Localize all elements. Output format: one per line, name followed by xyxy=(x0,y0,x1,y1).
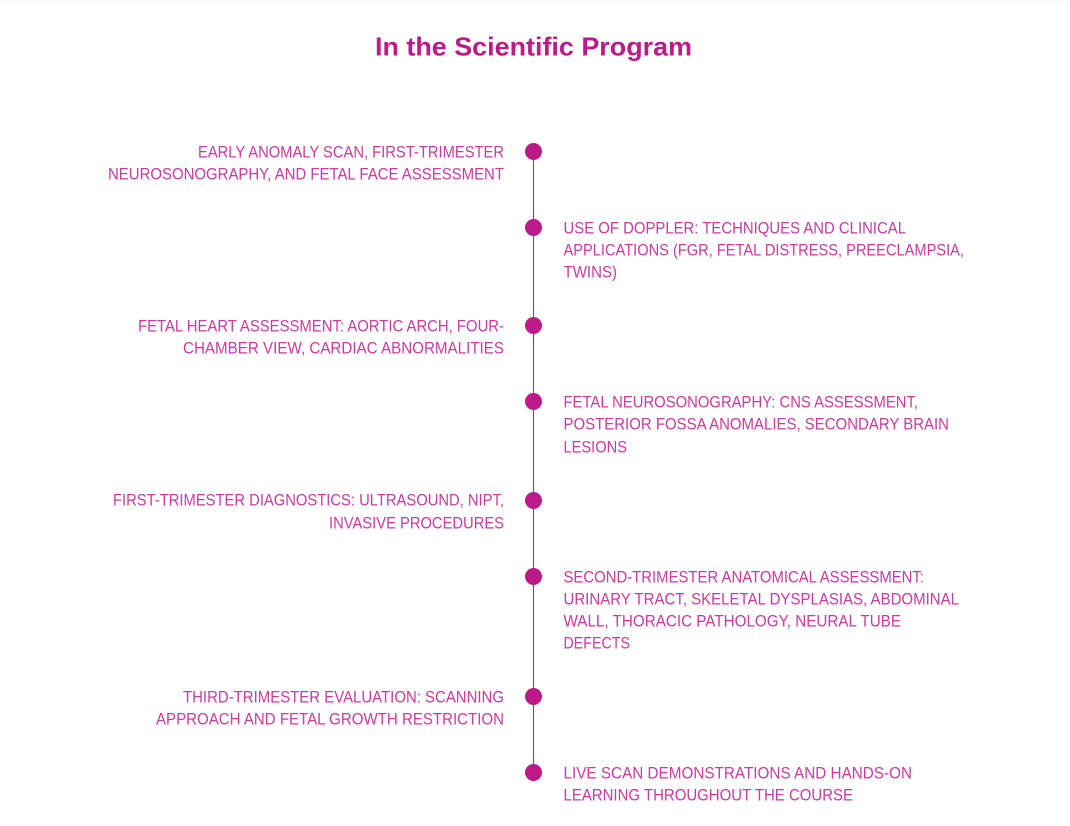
item 3: fetal heart assessment: FETAL HEART ASSESSMENT: AORTIC ARCH, FOUR- xyxy=(138,318,504,336)
timeline dot 4 xyxy=(525,393,542,410)
timeline dot 5 xyxy=(525,492,542,509)
item 8: live scan demonstrations: LEARNING THROUGHOUT THE COURSE xyxy=(564,786,853,804)
item 4: fetal neurosonography xyxy=(564,394,949,456)
timeline dot 2 xyxy=(525,219,542,236)
item 5: first-trimester diagnostics: INVASIVE PROCEDURES xyxy=(329,514,504,532)
timeline dot 7 xyxy=(525,688,542,705)
timeline dot 1 xyxy=(525,143,542,160)
title: In the Scientific Program xyxy=(375,32,692,62)
item 3: fetal heart assessment: CHAMBER VIEW, CARDIAC ABNORMALITIES xyxy=(183,340,504,358)
item 6: second-trimester anatomical assessment: WALL, THORACIC PATHOLOGY, NEURAL TUBE xyxy=(564,612,901,630)
item 8: live scan demonstrations: LIVE SCAN DEMONSTRATIONS AND HANDS-ON xyxy=(564,764,912,782)
item 7: third-trimester evaluation: APPROACH AND FETAL GROWTH RESTRICTION xyxy=(156,710,504,728)
item 7: third-trimester evaluation xyxy=(156,688,504,728)
item 5: first-trimester diagnostics xyxy=(113,492,504,532)
item 5: first-trimester diagnostics: FIRST-TRIMESTER DIAGNOSTICS: ULTRASOUND, NIPT, xyxy=(113,492,504,510)
item 1: early anomaly scan xyxy=(108,144,504,184)
item 6: second-trimester anatomical assessment xyxy=(564,568,959,652)
item 2: use of doppler xyxy=(564,220,964,282)
item 2: use of doppler: USE OF DOPPLER: TECHNIQUES AND CLINICAL xyxy=(564,220,906,238)
item 7: third-trimester evaluation: THIRD-TRIMESTER EVALUATION: SCANNING xyxy=(183,688,504,706)
timeline vertical line xyxy=(533,152,534,773)
timeline dot 8 xyxy=(525,764,542,781)
item 4: fetal neurosonography: LESIONS xyxy=(564,438,627,456)
item 2: use of doppler: APPLICATIONS (FGR, FETAL DISTRESS, PREECLAMPSIA, xyxy=(564,242,964,260)
item 4: fetal neurosonography: POSTERIOR FOSSA ANOMALIES, SECONDARY BRAIN xyxy=(564,416,949,434)
item 1: early anomaly scan: EARLY ANOMALY SCAN, FIRST-TRIMESTER xyxy=(198,144,504,162)
timeline dot 3 xyxy=(525,317,542,334)
item 6: second-trimester anatomical assessment: URINARY TRACT, SKELETAL DYSPLASIAS, ABDOMINAL xyxy=(564,590,959,608)
item 4: fetal neurosonography: FETAL NEUROSONOGRAPHY: CNS ASSESSMENT, xyxy=(564,394,918,412)
item 1: early anomaly scan: NEUROSONOGRAPHY, AND FETAL FACE ASSESSMENT xyxy=(108,166,504,184)
item 3: fetal heart assessment xyxy=(138,318,504,358)
timeline xyxy=(525,143,542,781)
item 8: live scan demonstrations xyxy=(564,764,912,804)
item 6: second-trimester anatomical assessment: DEFECTS xyxy=(564,634,630,652)
timeline dot 6 xyxy=(525,568,542,585)
item 2: use of doppler: TWINS) xyxy=(564,264,617,282)
item 6: second-trimester anatomical assessment: SECOND-TRIMESTER ANATOMICAL ASSESSMENT: xyxy=(564,568,924,586)
